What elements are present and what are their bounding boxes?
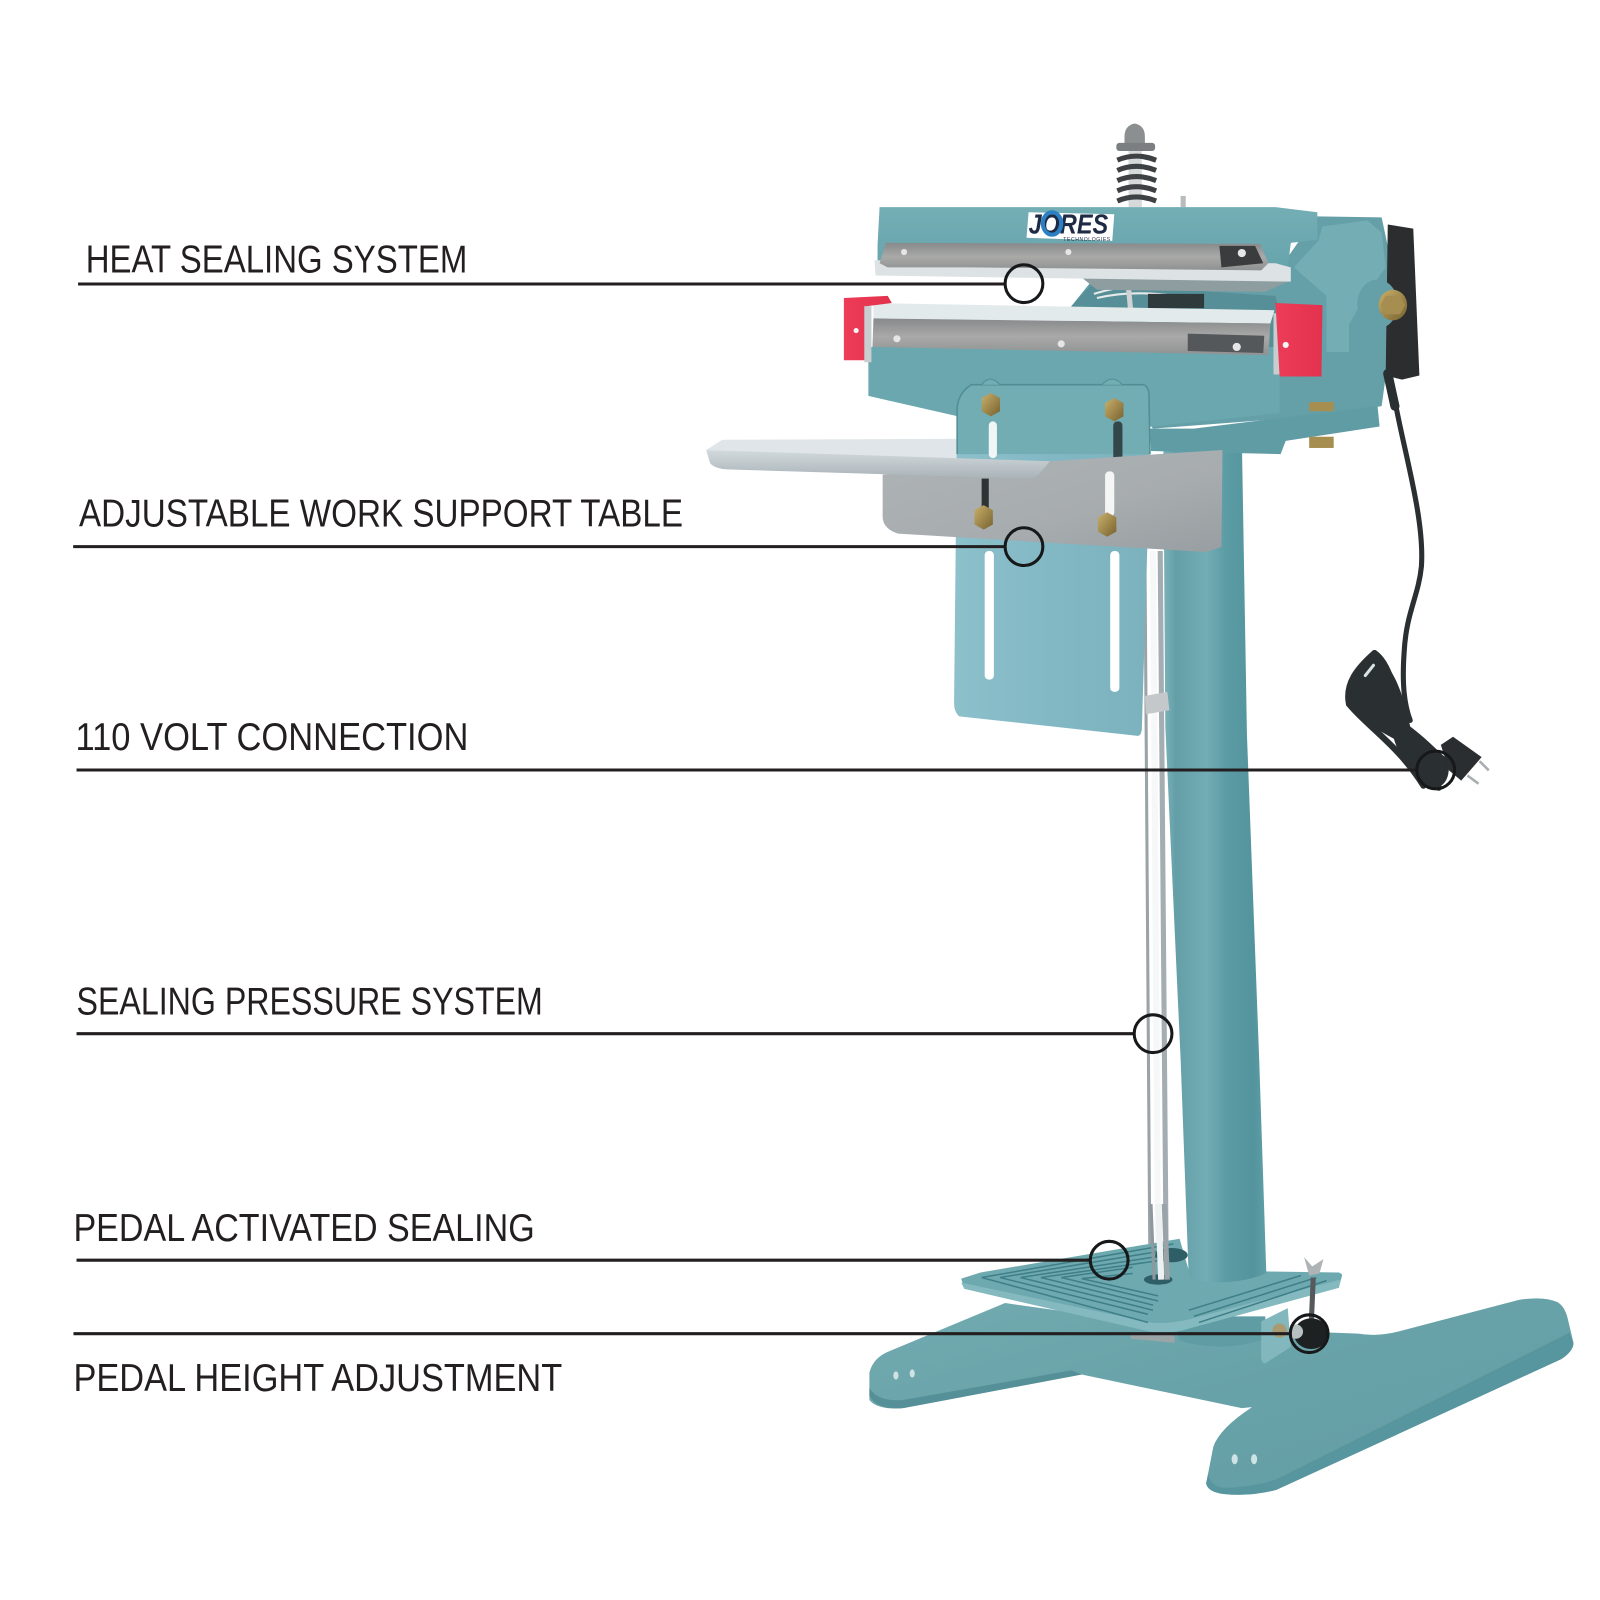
support pole — [1163, 439, 1266, 1282]
marker circle — [1290, 1315, 1328, 1353]
upper jaw underside — [1082, 278, 1288, 292]
pedal — [961, 1239, 1342, 1333]
Jores logo: TECHNOLOGIES — [1063, 237, 1111, 243]
label: PEDAL ACTIVATED SEALING — [73, 1207, 535, 1250]
callout: sealing pressure system — [77, 980, 1172, 1053]
callout: adjustable work support table — [73, 493, 1043, 566]
leader line — [77, 1259, 1090, 1262]
spring top assembly — [1116, 123, 1186, 207]
table front lip — [706, 450, 1050, 479]
leader line — [73, 1332, 1291, 1335]
rear casting — [1071, 216, 1392, 429]
pressure rod — [1145, 551, 1166, 1281]
marker circle — [1417, 751, 1455, 789]
pole collar — [1173, 1316, 1265, 1346]
Jores logo: JORES — [1029, 209, 1109, 240]
marker circle — [1005, 265, 1043, 303]
table top surface — [706, 439, 1050, 461]
upper chrome heating bar — [880, 243, 1268, 270]
marker circle — [1134, 1015, 1172, 1053]
product photo: foot-operated impulse sealer — [706, 123, 1573, 1495]
callout: heat sealing system — [78, 238, 1043, 303]
lower chrome heating bar — [872, 318, 1270, 355]
marker circle — [1005, 528, 1043, 566]
callout: pedal height adjustment — [73, 1315, 1328, 1400]
lower jaw housing — [868, 347, 1280, 427]
base foot — [869, 1298, 1573, 1495]
upper jaw housing — [878, 207, 1317, 267]
rod clamp — [1145, 692, 1169, 714]
lower white strip — [873, 303, 1274, 323]
label: HEAT SEALING SYSTEM — [86, 238, 467, 281]
pivot bolt — [1357, 280, 1407, 329]
leader line — [77, 768, 1417, 772]
label: ADJUSTABLE WORK SUPPORT TABLE — [79, 493, 683, 536]
left red end cap — [844, 296, 892, 362]
callout: 110 volt connection — [76, 716, 1455, 789]
pedal adjuster bracket and wing bolt — [1261, 1257, 1329, 1363]
marker circle — [1090, 1241, 1128, 1279]
grey table bracket — [883, 450, 1222, 552]
black control box — [1386, 224, 1419, 380]
spring mechanism between jaws — [1094, 278, 1204, 310]
label: PEDAL HEIGHT ADJUSTMENT — [73, 1357, 562, 1400]
mounting plate under jaw — [1150, 402, 1380, 454]
callout: pedal activated sealing — [73, 1207, 1128, 1279]
power plug — [1441, 737, 1489, 784]
label: 110 VOLT CONNECTION — [76, 716, 468, 759]
leader line — [78, 282, 1005, 285]
adjustable vertical plate — [954, 379, 1150, 736]
leader line — [73, 545, 1005, 548]
power cord — [1347, 373, 1449, 790]
label: SEALING PRESSURE SYSTEM — [77, 980, 543, 1023]
leader line — [77, 1032, 1135, 1035]
right red end cap — [1273, 303, 1322, 377]
upper silicone strip — [874, 260, 1291, 282]
upper plate bolts — [982, 393, 1123, 421]
rod lower end — [1151, 1204, 1167, 1280]
